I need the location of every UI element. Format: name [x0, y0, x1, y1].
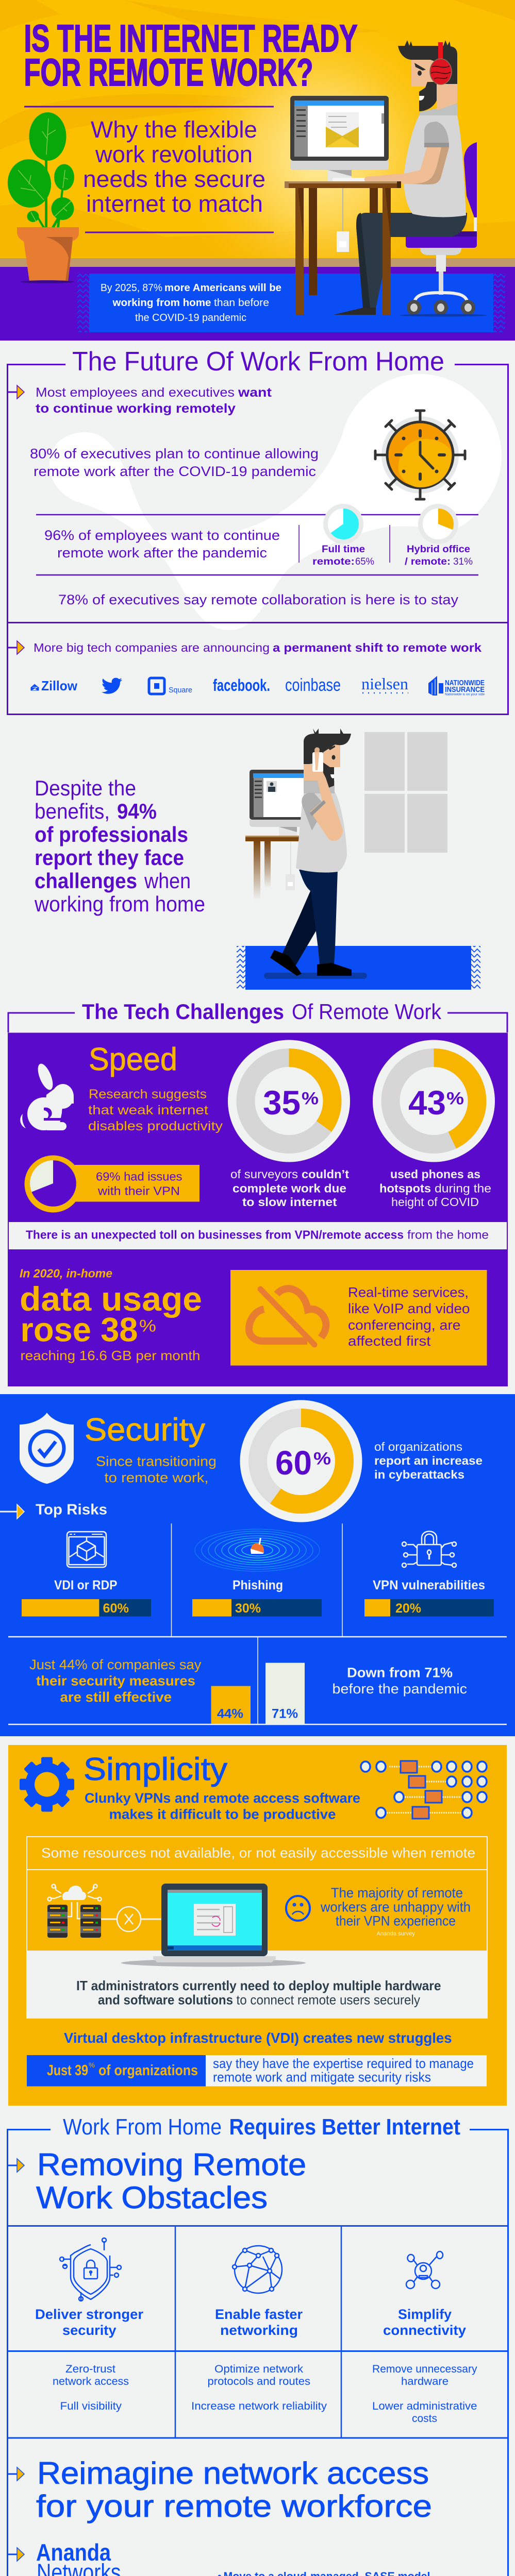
text: 94% of professionals: 94% — [117, 799, 157, 823]
subtitle: work revolution — [95, 141, 253, 167]
risk: vdi or rdp: VDI or RDP — [54, 1578, 118, 1592]
stat: 39% of organizations: of organizations — [98, 2062, 198, 2079]
title: IS THE INTERNET READY — [24, 17, 358, 60]
heading: removing remote work obstacles — [36, 2147, 306, 2215]
text: cyberattacks — [374, 1440, 483, 1481]
text: since transitioning: to remote work, — [104, 1470, 208, 1485]
stat: data usage: reaching 16.6 GB per month — [21, 1348, 200, 1363]
text: 94% of professionals: benefits, — [35, 799, 110, 823]
heading: simplicity: Simplicity — [84, 1752, 227, 1787]
icon: laptop — [121, 1884, 306, 1967]
title — [24, 17, 358, 94]
rug shadow — [264, 973, 367, 979]
icon: broken connection — [101, 1907, 195, 1931]
panel: the tech challenges of remote work — [8, 999, 508, 1386]
risk: phishing: 30% — [235, 1601, 261, 1616]
column: simplify connectivity: Remove unnecessary — [372, 2363, 477, 2375]
text: surveyors: to slow internet — [242, 1195, 337, 1209]
panel: despite the benefits — [34, 728, 480, 990]
subtitle: needs the secure — [83, 166, 265, 192]
box: it administrators background — [26, 1951, 488, 2019]
text: research suggests — [88, 1087, 223, 1133]
text: down from 71% — [332, 1665, 467, 1697]
logo: nationwide insurance: NATIONWIDE — [445, 679, 485, 687]
stat: 39% of organizations: Just 39 — [47, 2062, 88, 2079]
text: majority unhappy: workers are unhappy with — [320, 1899, 471, 1914]
monitor — [290, 96, 389, 181]
arrow marker — [7, 2467, 24, 2481]
logo: zillow: Zillow — [41, 678, 78, 693]
donut chart: 43%: % — [446, 1089, 464, 1109]
column: simplify connectivity: hardware — [401, 2376, 448, 2387]
desk — [285, 181, 401, 315]
pie chart: hybrid office 31%: Hybrid office — [407, 544, 470, 555]
section border — [7, 365, 508, 714]
callout: 87% stat — [101, 282, 281, 324]
heading: The Tech Challenges — [82, 999, 284, 1024]
pie chart: hybrid office 31%: 31% — [453, 556, 473, 567]
icon: sad face — [286, 1896, 310, 1921]
worker arm — [364, 122, 449, 184]
column: faster networking: Optimize network — [214, 2363, 304, 2375]
logo: square: Square — [169, 686, 192, 694]
column: faster networking: networking — [220, 2323, 298, 2338]
column: simplify connectivity: Simplify — [398, 2307, 452, 2322]
window — [364, 732, 447, 853]
subtitle: internet to match — [86, 191, 263, 217]
stat: data usage: data usage — [20, 1280, 202, 1318]
pie chart: full time remote 65% — [312, 504, 374, 567]
text: top risks: Top Risks — [36, 1501, 107, 1518]
subtitle — [24, 106, 274, 233]
heading — [63, 2114, 460, 2140]
stat: 69% vpn issues: with their VPN — [97, 1184, 180, 1197]
callout: 87% stat: By 2025, 87% — [101, 282, 162, 294]
heading: Work From Home — [63, 2114, 222, 2140]
heading: reimagine network access — [36, 2456, 432, 2523]
stat: 39% of organizations — [27, 2055, 487, 2087]
icon: servers and cloud — [47, 1885, 101, 1938]
worker torso — [404, 84, 466, 217]
text: 44% of companies: their security measures — [36, 1673, 195, 1689]
arrow marker — [7, 2548, 24, 2561]
risk grid lines — [8, 1523, 507, 1724]
column: faster networking: Increase network reliability — [191, 2400, 327, 2412]
panel: header — [0, 0, 515, 341]
stat: 69% vpn issues: 69% had issues — [96, 1170, 182, 1183]
column: stronger security: Deliver stronger — [35, 2307, 143, 2322]
column: simplify connectivity: connectivity — [383, 2323, 466, 2338]
heading: ananda networks: Ananda — [36, 2539, 111, 2566]
stat: data usage: rose 38 — [21, 1311, 138, 1349]
text: down from 71%: Down from 71% — [347, 1665, 453, 1681]
illustration: person on phone — [270, 728, 352, 976]
squiggle strip right — [493, 274, 505, 332]
column: simplify connectivity — [372, 2251, 477, 2425]
power cable and outlet — [337, 188, 349, 252]
section border — [7, 2130, 508, 2576]
text: 44% of companies: Just 44% of companies say — [29, 1657, 202, 1672]
text: hotspots: used phones as — [390, 1167, 480, 1181]
column: simplify connectivity: costs — [412, 2413, 437, 2425]
text: employees want to continue: to continue working remotely — [36, 401, 236, 416]
worker head — [398, 40, 457, 111]
icon: node flow diagram — [361, 1761, 487, 1819]
donut chart: 60%: % — [313, 1449, 331, 1468]
risk: phishing — [192, 1529, 322, 1617]
heading: removing remote work obstacles: Removing Remote — [37, 2147, 306, 2182]
text: 96% of employees: 96% of employees want to continue — [44, 528, 280, 543]
text: hotspots: hotspots — [379, 1182, 431, 1195]
logo: nationwide insurance: INSURANCE — [445, 685, 485, 694]
bar chart: 44% vs 71% — [211, 1663, 305, 1724]
column: stronger security: security — [62, 2323, 117, 2338]
text: 94% of professionals: Despite the — [35, 776, 136, 800]
heading: Requires Better Internet — [229, 2114, 460, 2140]
heading: speed: Speed — [89, 1042, 177, 1077]
pie chart: hybrid office 31%: / remote: — [405, 556, 451, 567]
text: 94% of professionals: challenges — [35, 869, 137, 893]
chair — [400, 142, 487, 316]
arrow marker — [7, 641, 24, 654]
text: surveyors: of surveyors — [230, 1167, 298, 1181]
text: 96% of employees — [44, 528, 280, 561]
text: 94% of professionals: report they face — [35, 845, 184, 870]
icon: rabbit — [20, 1062, 74, 1130]
logo: nationwide insurance — [428, 676, 485, 697]
illustration: worker at desk — [285, 40, 487, 316]
text: majority unhappy: Ananda survey — [376, 1931, 415, 1937]
panel: the future of work from home — [7, 347, 509, 714]
callout: 87% stat: working from home — [112, 297, 211, 309]
risk: vpn vulnerabilities — [364, 1531, 494, 1617]
box: resources — [27, 1837, 487, 1951]
logos row — [30, 674, 485, 697]
text: employees want to continue — [36, 385, 272, 416]
text: it administrators: to connect remote users securely — [236, 1992, 420, 2007]
band: unexpected toll — [9, 1222, 507, 1249]
text: 80% of executives — [30, 446, 319, 479]
heading: reimagine network access: for your remote workforce — [36, 2489, 432, 2523]
text: hotspots: during the — [435, 1182, 491, 1195]
pie chart: hybrid office 31% — [405, 504, 473, 567]
desk back legs — [309, 188, 378, 295]
box: resources: Some resources not available, or not easily accessible when remote — [41, 1845, 475, 1861]
illustration: monitor and desk — [245, 770, 306, 900]
panel: simplicity — [8, 1745, 507, 2106]
text: surveyors: couldn’t — [302, 1167, 349, 1181]
column: stronger security: Full visibility — [60, 2400, 122, 2412]
divider lines — [36, 515, 478, 575]
bar chart: 44% vs 71%: 71% — [272, 1706, 298, 1721]
stat: 69% vpn issues — [25, 1155, 200, 1213]
logo: coinbase: coinbase — [285, 675, 341, 695]
callout: 87% stat: the COVID-19 pandemic — [135, 312, 246, 324]
logo: square — [149, 678, 192, 694]
callout: real-time services — [230, 1270, 487, 1365]
risk: phishing: Phishing — [232, 1578, 283, 1592]
grid lines — [7, 2226, 508, 2438]
column: stronger security — [35, 2238, 143, 2412]
callout: real-time services: like VoIP and video — [348, 1301, 470, 1316]
column: faster networking: Enable faster — [215, 2307, 303, 2322]
column: faster networking: protocols and routes — [207, 2376, 310, 2387]
heading: Of Remote Work — [292, 999, 442, 1024]
text: 94% of professionals — [34, 776, 205, 916]
text: permanent shift — [34, 641, 481, 654]
donut chart: 43%: 43 — [408, 1083, 446, 1122]
text: 94% of professionals: of professionals — [35, 822, 188, 846]
white blob background — [49, 374, 502, 630]
text: employees want to continue: want — [238, 385, 272, 400]
wall baseboard — [0, 258, 515, 267]
worker legs — [334, 213, 467, 315]
text: cyberattacks: in cyberattacks — [374, 1468, 464, 1481]
squiggle strips — [237, 946, 480, 990]
heading: security: Security — [85, 1412, 205, 1448]
donut chart: 35% — [228, 1040, 350, 1162]
text: since transitioning — [96, 1454, 217, 1485]
callout: real-time services: affected first — [348, 1333, 431, 1349]
logo: nationwide insurance: Nationwide is on your side — [445, 693, 485, 697]
text: surveyors — [230, 1167, 349, 1209]
risk: vpn vulnerabilities: VPN vulnerabilities — [373, 1578, 485, 1592]
callout: real-time services: conferencing, are — [348, 1317, 461, 1333]
icon: virus clock — [375, 411, 465, 499]
heading: reimagine network access: Reimagine network access — [37, 2456, 429, 2490]
text: majority unhappy: their VPN experience — [336, 1913, 456, 1929]
text: research suggests: Research suggests — [89, 1087, 207, 1101]
risk: vdi or rdp — [22, 1532, 151, 1617]
blue background — [0, 1394, 515, 1736]
text: vdi new struggles: Virtual desktop infrastructure (VDI) creates new struggles — [64, 2030, 452, 2046]
squiggle strip left — [77, 274, 89, 332]
donut chart: 60%: 60 — [275, 1444, 312, 1482]
arrow marker — [7, 385, 24, 399]
text: employees want to continue: Most employees and executives — [36, 385, 235, 400]
text: majority unhappy — [320, 1885, 471, 1937]
pie chart: full time remote 65%: 65% — [355, 556, 374, 567]
risk: vpn vulnerabilities: 20% — [395, 1601, 421, 1616]
panel: security — [0, 1394, 515, 1736]
icon: network globe — [232, 2246, 282, 2293]
band: unexpected toll: from the home — [407, 1228, 489, 1242]
text: clunky vpns: Clunky VPNs and remote access software — [85, 1790, 360, 1806]
rug / callout background — [89, 274, 493, 332]
logo: facebook: facebook. — [213, 676, 270, 694]
stat: data usage: % — [139, 1317, 156, 1335]
text: clunky vpns — [85, 1790, 360, 1822]
callout: 87% stat: than before — [214, 297, 269, 309]
text: it administrators — [76, 1978, 441, 2007]
callout: 87% stat: more Americans will be — [164, 282, 281, 294]
text: 94% of professionals: working from home — [34, 892, 205, 916]
section divider — [7, 622, 509, 623]
column: stronger security: Zero-trust — [65, 2363, 115, 2375]
icon: potted plant — [5, 112, 79, 283]
header wall background — [0, 0, 515, 258]
text: it administrators: and software solutions — [98, 1992, 233, 2007]
icon: hub nodes — [406, 2251, 443, 2289]
icon: phishing float with ripples — [195, 1529, 320, 1571]
donut chart: 35%: 35 — [263, 1083, 301, 1122]
stat: 39% of organizations: say they have the expertise required to manage — [213, 2056, 474, 2071]
text: hotspots: height of COVID — [391, 1195, 479, 1209]
purple panel background — [8, 1032, 508, 1386]
heading: The Future Of Work From Home — [72, 347, 444, 377]
text: 94% of professionals: when — [144, 869, 191, 893]
panel: work from home requires better internet — [7, 2114, 508, 2576]
icon: window with cube — [67, 1532, 106, 1567]
text: clunky vpns: makes it difficult to be productive — [109, 1806, 336, 1822]
text: cyberattacks: report an increase — [374, 1454, 483, 1467]
icon: shield — [20, 1413, 74, 1484]
icon: cloud off — [249, 1289, 326, 1345]
pie chart: full time remote 65%: Full time — [322, 544, 365, 555]
donut chart: 60% — [240, 1400, 362, 1522]
subtitle: Why the flexible — [91, 116, 257, 143]
text: it administrators: IT administrators currently need to deploy multiple hardware — [76, 1978, 441, 1993]
risk: vdi or rdp: 60% — [103, 1601, 129, 1616]
text: hotspots — [379, 1167, 491, 1209]
gold background — [8, 1745, 507, 2106]
logo: nielsen: nielsen — [361, 674, 408, 693]
text: permanent shift: a permanent shift to remote work — [273, 641, 481, 654]
bar chart: 44% vs 71%: 44% — [217, 1706, 243, 1721]
heading: removing remote work obstacles: Work Obstacles — [36, 2180, 268, 2215]
column: stronger security: network access — [53, 2376, 129, 2387]
heading — [82, 999, 442, 1024]
stat: data usage: In 2020, in-home — [20, 1266, 112, 1280]
donut chart: 35%: % — [302, 1089, 319, 1109]
arrow marker — [0, 1504, 24, 1519]
text: 78% of executives: 78% of executives say remote collaboration is here is to stay — [58, 592, 459, 607]
icon: gear — [20, 1757, 74, 1811]
callout: real-time services: Real-time services, — [348, 1285, 469, 1300]
icon: circuit padlock — [402, 1531, 456, 1567]
icon: security shield — [60, 2238, 121, 2301]
band: unexpected toll: There is an unexpected toll on businesses from VPN/remote access — [26, 1228, 404, 1242]
text: down from 71%: before the pandemic — [332, 1681, 467, 1697]
text: research suggests: that weak internet — [88, 1103, 208, 1117]
column: faster networking — [191, 2246, 327, 2412]
pie chart: full time remote 65%: remote: — [312, 556, 355, 567]
stat: 39% of organizations: remote work and mitigate security risks — [213, 2069, 431, 2084]
text: 44% of companies: are still effective — [60, 1689, 172, 1705]
text: 96% of employees: remote work after the pandemic — [57, 545, 267, 561]
stat: data usage — [20, 1266, 202, 1363]
column: simplify connectivity: Lower administrative — [372, 2400, 477, 2412]
text: surveyors: complete work due — [232, 1182, 346, 1195]
logo: twitter — [102, 678, 122, 694]
stat: 39% of organizations: % — [89, 2061, 95, 2069]
text: permanent shift: More big tech companies are announcing — [34, 641, 270, 654]
floor rug — [245, 946, 471, 990]
text: cyberattacks: of organizations — [374, 1440, 462, 1453]
text: 80% of executives: remote work after the COVID-19 pandemic — [34, 464, 316, 479]
text: majority unhappy: The majority of remote — [331, 1885, 463, 1901]
arrow marker — [7, 2159, 24, 2172]
title: FOR REMOTE WORK? — [24, 51, 313, 94]
text: research suggests: disables productivity — [88, 1119, 223, 1133]
floor — [0, 267, 515, 341]
donut chart: 43% — [373, 1040, 495, 1162]
section border — [8, 1013, 507, 1032]
text: since transitioning: Since transitioning — [96, 1454, 217, 1469]
text: 80% of executives: 80% of executives plan to continue allowing — [30, 446, 319, 462]
text: 44% of companies — [29, 1657, 202, 1705]
